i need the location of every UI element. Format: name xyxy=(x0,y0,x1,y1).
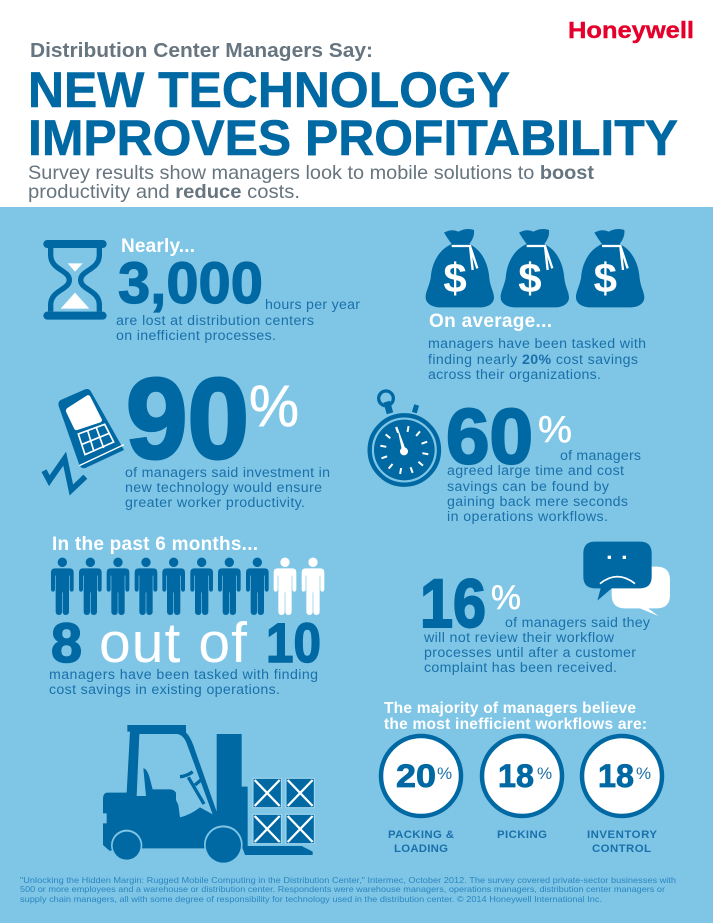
stat: 16 percent: processes until after a customer xyxy=(424,645,636,661)
header kicker: Distribution Center Managers Say: xyxy=(30,40,373,62)
stat: 3,000 hours: are lost at distribution centers xyxy=(116,313,314,329)
icon: money bags xyxy=(426,229,644,307)
stat circle: packing and loading: % xyxy=(437,764,452,783)
stat: 3,000 hours: hours per year xyxy=(265,297,360,313)
stat circle: picking: PICKING xyxy=(497,829,547,841)
stat circle: picking: 18 xyxy=(498,758,534,794)
title: NEW TECHNOLOGY xyxy=(28,62,510,118)
stat: 20 percent cost savings: across their organizations. xyxy=(428,367,601,383)
stat: 60 percent: savings can be found by xyxy=(447,479,610,495)
stat: 3,000 hours: on inefficient processes. xyxy=(116,328,276,344)
stat: 60 percent: agreed large time and cost xyxy=(447,463,624,479)
heading: most inefficient workflows: The majority of managers believe xyxy=(384,700,636,717)
stat circle: packing and loading: LOADING xyxy=(394,843,448,855)
stat: 90 percent: new technology would ensure xyxy=(125,480,322,496)
icon: money bag 3 xyxy=(576,229,644,307)
stat: 8 out of 10: out of xyxy=(99,611,247,675)
stat: 60 percent: of managers xyxy=(560,448,641,464)
stat: 16 percent: will not review their workflow xyxy=(423,630,615,646)
stat: 60 percent xyxy=(446,392,641,525)
logo: Honeywell: Honeywell xyxy=(568,17,694,43)
stat: 8 out of 10: 8 xyxy=(51,611,82,674)
pictogram: 8 of 10 people xyxy=(51,558,324,615)
subtitle xyxy=(28,162,595,203)
stat circle: packing and loading: PACKING & xyxy=(388,829,454,841)
stat: 20 percent cost savings: managers have been tasked with xyxy=(428,336,646,352)
stat: 3,000 hours xyxy=(116,236,360,344)
stat: 8 out of 10: cost savings in existing operations. xyxy=(49,682,280,698)
stat: 3,000 hours: Nearly... xyxy=(121,236,195,257)
footnote xyxy=(20,876,676,904)
heading: in the past 6 months: In the past 6 months... xyxy=(52,534,258,555)
heading: most inefficient workflows: the most inefficient workflows are: xyxy=(384,716,647,733)
stat: 3,000 hours: 3,000 xyxy=(118,251,263,316)
stat: 90 percent xyxy=(125,356,330,511)
icon: forklift xyxy=(103,725,314,864)
icon: money bag 3: $ xyxy=(594,254,617,301)
stat circle: inventory control: INVENTORY xyxy=(587,829,657,841)
stat: 60 percent: in operations workflows. xyxy=(447,509,608,525)
stat: 8 out of 10: 10 xyxy=(266,611,321,674)
stat circle: picking: % xyxy=(537,764,552,783)
stat: 16 percent: of managers said they xyxy=(505,615,651,631)
icon: stopwatch xyxy=(370,391,439,485)
icon: money bag 2: $ xyxy=(518,254,542,301)
icon: money bag 1: $ xyxy=(443,254,467,301)
icon: unhappy speech bubbles xyxy=(583,542,670,616)
subtitle: productivity and reduce costs. xyxy=(28,181,300,203)
stat: 90 percent: greater worker productivity. xyxy=(125,495,305,511)
icon: money bag 2 xyxy=(501,229,569,307)
icon: mobile computer xyxy=(44,389,124,490)
panel: light blue background xyxy=(0,207,713,923)
stat: 90 percent: 90 xyxy=(126,356,249,483)
icon: hourglass xyxy=(43,240,107,320)
subtitle: Survey results show managers look to mobile solutions to boost xyxy=(28,162,595,184)
stat circle: inventory control xyxy=(582,736,662,855)
stat circle: picking xyxy=(482,736,562,841)
stat circle: inventory control: % xyxy=(636,764,651,783)
stat: 16 percent: % xyxy=(491,579,521,617)
heading: most inefficient workflows xyxy=(384,700,647,733)
stat circle: packing and loading xyxy=(381,736,461,855)
stat: 8 out of 10 xyxy=(49,611,321,698)
stat: 90 percent: % xyxy=(249,374,299,439)
stat circle: inventory control: 18 xyxy=(598,758,634,794)
stat: 60 percent: gaining back mere seconds xyxy=(447,494,628,510)
stat: 16 percent: 16 xyxy=(420,565,486,642)
stat: 16 percent xyxy=(420,565,651,676)
footnote: supply chain managers, all with some degree of responsibility for technology used in the distribution center. © 2014 Honeywell International Inc. xyxy=(20,895,602,904)
title: IMPROVES PROFITABILITY xyxy=(28,110,678,166)
stat: 8 out of 10: managers have been tasked with finding xyxy=(49,667,318,683)
stat: 60 percent: 60 xyxy=(446,392,533,480)
footnote: 500 or more employees and a warehouse or distribution center. Respondents were warehouse managers, operations managers, distribution center managers or xyxy=(20,885,665,894)
stat: 20 percent cost savings xyxy=(428,311,646,383)
stat: 90 percent: of managers said investment in xyxy=(125,465,330,481)
stat: 16 percent: complaint has been received. xyxy=(424,660,617,676)
icon: pallet boxes xyxy=(253,778,314,844)
stat: 20 percent cost savings: finding nearly 20% cost savings xyxy=(428,352,638,368)
icon: money bag 1 xyxy=(426,229,494,307)
stat: 60 percent: % xyxy=(538,409,572,451)
title xyxy=(28,62,678,166)
stat: 20 percent cost savings: On average... xyxy=(429,311,552,332)
stat circle: packing and loading: 20 xyxy=(396,758,436,794)
stat circle: inventory control: CONTROL xyxy=(592,843,651,855)
footnote: "Unlocking the Hidden Margin: Rugged Mobile Computing in the Distribution Center," Intermec, October 2012. The survey covered private-sector businesses with xyxy=(20,876,676,885)
